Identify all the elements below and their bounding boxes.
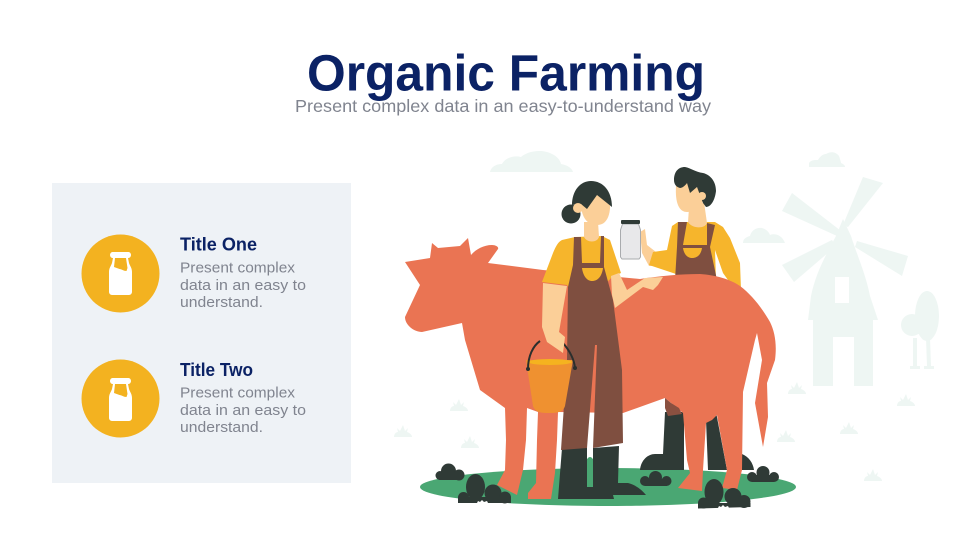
- ground: [420, 457, 796, 506]
- description two: Present complex: [180, 384, 296, 402]
- woman: ear: [573, 203, 583, 213]
- shrub front left: [458, 474, 511, 504]
- illustration: farmers and cow: [405, 167, 796, 508]
- man: ear: [698, 192, 706, 200]
- man: left hand and arm: [640, 229, 656, 266]
- description one: understand.: [180, 294, 263, 311]
- bucket: [526, 341, 577, 413]
- item one: [82, 234, 306, 312]
- woman: face: [581, 195, 610, 225]
- tree: [901, 291, 939, 369]
- item two: [82, 360, 306, 438]
- panel: text list: [52, 183, 351, 483]
- cloud: top centre: [490, 151, 573, 172]
- description one: Present complex: [180, 260, 296, 276]
- man: face: [676, 182, 704, 212]
- icon: milk bottle one: [82, 234, 160, 312]
- woman: bun: [562, 204, 580, 224]
- man behind cow: [640, 167, 754, 470]
- woman: hair: [572, 181, 612, 209]
- description two: data in an easy to: [180, 402, 306, 419]
- man: neck: [688, 202, 707, 227]
- cow: [405, 238, 776, 499]
- icon: milk bottle two: [82, 360, 160, 438]
- subtitle: Present complex data in an easy-to-understand way: [295, 96, 711, 116]
- description two: understand.: [180, 419, 263, 436]
- grass tufts: [394, 382, 915, 481]
- woman: overalls: [561, 236, 623, 450]
- shrub front right: [698, 479, 750, 508]
- man: hair: [674, 167, 716, 207]
- title: Organic Farming: [307, 44, 705, 102]
- cloud: right: [743, 228, 785, 243]
- shrub centre: [640, 471, 672, 486]
- man: shirt: [649, 222, 741, 290]
- panel background: [52, 183, 351, 483]
- windmill: [782, 177, 908, 386]
- cow: body: [405, 238, 776, 499]
- cloud: top right: [809, 152, 845, 167]
- woman: left arm: [542, 283, 567, 353]
- woman: right arm: [611, 273, 663, 308]
- man: overalls: [675, 222, 717, 280]
- man: pocket: [683, 248, 702, 258]
- shrubs layer: [436, 464, 779, 508]
- description one: data in an easy to: [180, 277, 306, 294]
- heading: title one: Title One: [180, 234, 257, 254]
- illustration: farm background: [394, 151, 939, 481]
- woman: [526, 181, 663, 499]
- man: legs and boots: [640, 412, 684, 470]
- heading: title two: Title Two: [180, 360, 253, 380]
- cow: udder: [665, 398, 682, 416]
- shrub right: [747, 466, 779, 482]
- jar: [620, 220, 640, 259]
- woman: boots: [558, 446, 646, 499]
- woman: shirt: [542, 236, 621, 290]
- woman: neck: [584, 222, 599, 242]
- woman: pocket: [582, 268, 603, 281]
- shrub left: [436, 464, 464, 480]
